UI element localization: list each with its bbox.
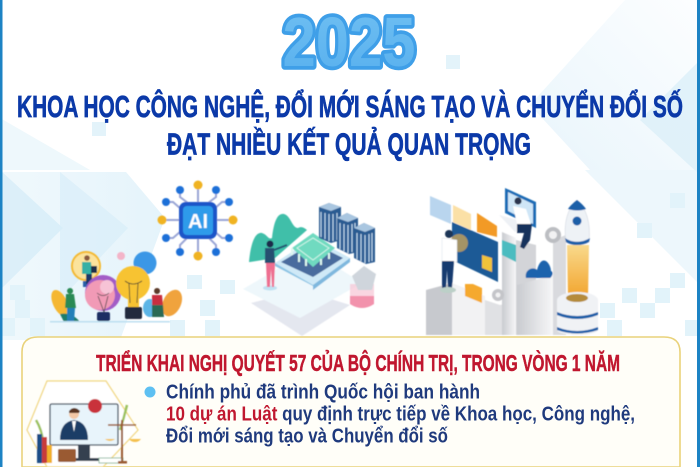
illustration: chip platform and servers bbox=[243, 203, 376, 336]
icon: AI chip bbox=[158, 180, 238, 260]
year 2025: 2025 bbox=[282, 3, 416, 81]
body text: Đổi mới sáng tạo và Chuyển đổi số bbox=[166, 426, 448, 448]
body text bbox=[166, 382, 635, 448]
bullet bbox=[144, 386, 156, 398]
title: ĐẠT NHIỀU KẾT QUẢ QUAN TRỌNG bbox=[167, 126, 531, 162]
icon: online law teacher bbox=[27, 381, 141, 467]
illustration: light bulbs and people bbox=[48, 252, 186, 322]
panel: resolution 57 card bbox=[22, 337, 680, 467]
title bbox=[17, 88, 683, 162]
illustration: digital city and rocket bbox=[426, 188, 598, 335]
icon: AI chip: AI bbox=[188, 211, 208, 233]
body text: 10 dự án Luật quy định trực tiếp về Khoa học, Công nghệ, bbox=[166, 404, 635, 426]
body text: Chính phủ đã trình Quốc hội ban hành bbox=[166, 382, 480, 404]
